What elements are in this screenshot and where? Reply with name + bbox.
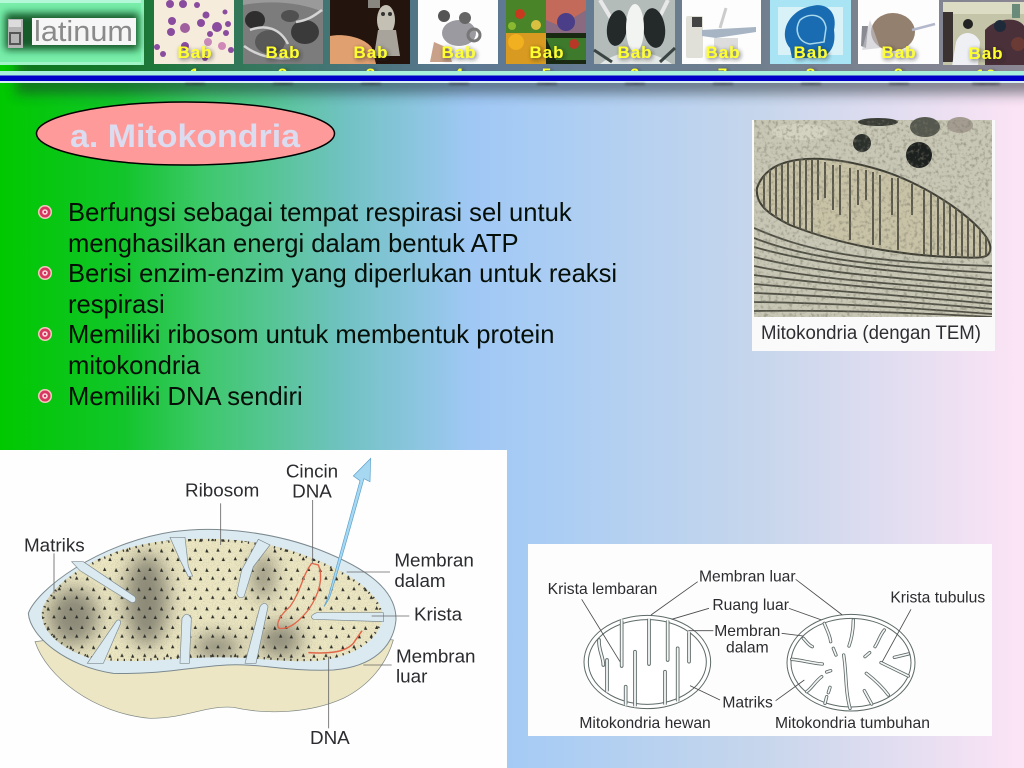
label: Membran dalam: dalam bbox=[394, 570, 446, 591]
label: Bab bbox=[793, 43, 829, 62]
thumbnail: Bab 9 bbox=[858, 0, 939, 84]
label: Krista lembaran: Krista lembaran bbox=[548, 581, 657, 598]
header logo panel bbox=[0, 0, 144, 65]
label: 3 bbox=[366, 65, 376, 84]
label bbox=[881, 43, 917, 84]
label: Ribosom: Ribosom bbox=[185, 480, 259, 501]
point 2 text: respirasi bbox=[68, 291, 165, 319]
label: Bab bbox=[353, 43, 389, 62]
bullet 3 bbox=[38, 327, 52, 341]
label bbox=[265, 43, 301, 84]
bullet 4 bbox=[38, 389, 52, 403]
cristae folds bbox=[72, 537, 383, 663]
label: Bab bbox=[441, 43, 477, 62]
label: Krista: Krista bbox=[414, 604, 463, 625]
label: Bab bbox=[705, 43, 741, 62]
label: Bab bbox=[968, 44, 1004, 63]
label: Mitokondria hewan: Mitokondria hewan bbox=[579, 715, 711, 732]
label: Bab bbox=[617, 43, 653, 62]
label: 10 bbox=[976, 66, 996, 85]
point 3 text: mitokondria bbox=[68, 352, 201, 380]
thumbnail: Bab 1 bbox=[154, 0, 234, 84]
label: 2 bbox=[278, 65, 288, 84]
matrix compartments bbox=[42, 538, 382, 662]
header shadow bbox=[16, 0, 1024, 94]
leader lines bbox=[54, 500, 409, 728]
label bbox=[177, 43, 213, 84]
thumbnail: Bab 5 bbox=[506, 0, 586, 84]
label: Membran dalam: dalam bbox=[726, 640, 769, 657]
outer lower body bbox=[35, 617, 393, 718]
red DNA strand bbox=[308, 631, 362, 653]
bullet 2 bbox=[38, 266, 52, 280]
label: Bab bbox=[265, 43, 301, 62]
label: Membran dalam: Membran bbox=[714, 623, 780, 640]
label: 6 bbox=[630, 65, 640, 84]
label: Mitokondria tumbuhan: Mitokondria tumbuhan bbox=[775, 715, 930, 732]
label: 1 bbox=[190, 65, 200, 84]
plant cristae bbox=[792, 620, 908, 708]
diagram: mitochondrion cross-section panel bbox=[0, 450, 507, 768]
label: 9 bbox=[894, 65, 904, 84]
thumbnail: Bab 7 bbox=[682, 0, 761, 84]
animal mitochondrion bbox=[584, 615, 711, 709]
label: 7 bbox=[718, 65, 728, 84]
bullet 1 bbox=[38, 205, 52, 219]
label: Matriks: Matriks bbox=[24, 535, 85, 556]
leader lines bbox=[582, 579, 911, 701]
inner membrane stipple edge bbox=[42, 539, 383, 661]
red DNA ring bbox=[278, 563, 321, 629]
organelle dots bbox=[772, 117, 973, 168]
label bbox=[529, 43, 565, 84]
label: DNA: DNA bbox=[310, 727, 350, 748]
point 3 text: Memiliki ribosom untuk membentuk protein bbox=[68, 321, 554, 349]
label bbox=[353, 43, 389, 84]
heading: a. Mitokondria: a. Mitokondria bbox=[70, 118, 300, 154]
blue arrow bbox=[324, 458, 371, 607]
outer membrane rim bbox=[28, 529, 396, 674]
point 4 text: Memiliki DNA sendiri bbox=[68, 383, 303, 411]
thumbnail: Bab 10 bbox=[943, 2, 1024, 85]
caption: Mitokondria (dengan TEM) bbox=[761, 323, 981, 344]
label: Bab bbox=[177, 43, 213, 62]
diagram: animal and plant mitochondria panel bbox=[528, 544, 992, 736]
label: Membran luar: Membran luar bbox=[699, 569, 796, 586]
thumbnail: Bab 2 bbox=[243, 0, 323, 84]
thumbnail: Bab 4 bbox=[418, 0, 498, 84]
heading: a. Mitokondria bbox=[36, 102, 334, 165]
label: Ruang luar: Ruang luar bbox=[712, 597, 789, 614]
label: Membran luar: luar bbox=[396, 666, 427, 687]
plant mitochondrion bbox=[787, 614, 915, 711]
logo wordmark: latinum bbox=[34, 16, 133, 48]
label: 4 bbox=[454, 65, 464, 84]
thumbnail: Bab 3 bbox=[330, 0, 410, 84]
label: Membran dalam: Membran bbox=[394, 550, 474, 571]
label: Bab bbox=[881, 43, 917, 62]
label: Bab bbox=[529, 43, 565, 62]
bullet list bbox=[38, 199, 617, 411]
TEM micrograph panel bbox=[752, 117, 995, 351]
rough ER lines bbox=[754, 228, 992, 317]
label bbox=[441, 43, 477, 84]
thumbnail: Bab 8 bbox=[770, 0, 851, 84]
label: 8 bbox=[806, 65, 816, 84]
thumbnail: Bab 6 bbox=[594, 0, 675, 84]
point 1 text: menghasilkan energi dalam bentuk ATP bbox=[68, 230, 519, 258]
label bbox=[793, 43, 829, 84]
label bbox=[705, 43, 741, 84]
label bbox=[617, 43, 653, 84]
label: Cincin DNA: DNA bbox=[292, 481, 332, 502]
point 1 text: Berfungsi sebagai tempat respirasi sel untuk bbox=[68, 199, 572, 227]
label: Cincin DNA: Cincin bbox=[286, 460, 338, 481]
label bbox=[968, 44, 1004, 85]
logo mark bbox=[8, 19, 23, 48]
header rule band bbox=[0, 71, 1024, 85]
mitochondrion section bbox=[757, 158, 990, 258]
label: Matriks: Matriks bbox=[722, 694, 773, 711]
label: Krista tubulus: Krista tubulus bbox=[890, 590, 985, 607]
point 2 text: Berisi enzim-enzim yang diperlukan untuk reaksi bbox=[68, 260, 617, 288]
animal cristae bbox=[599, 620, 689, 705]
label: 5 bbox=[542, 65, 552, 84]
label: Membran luar: Membran bbox=[396, 645, 476, 666]
